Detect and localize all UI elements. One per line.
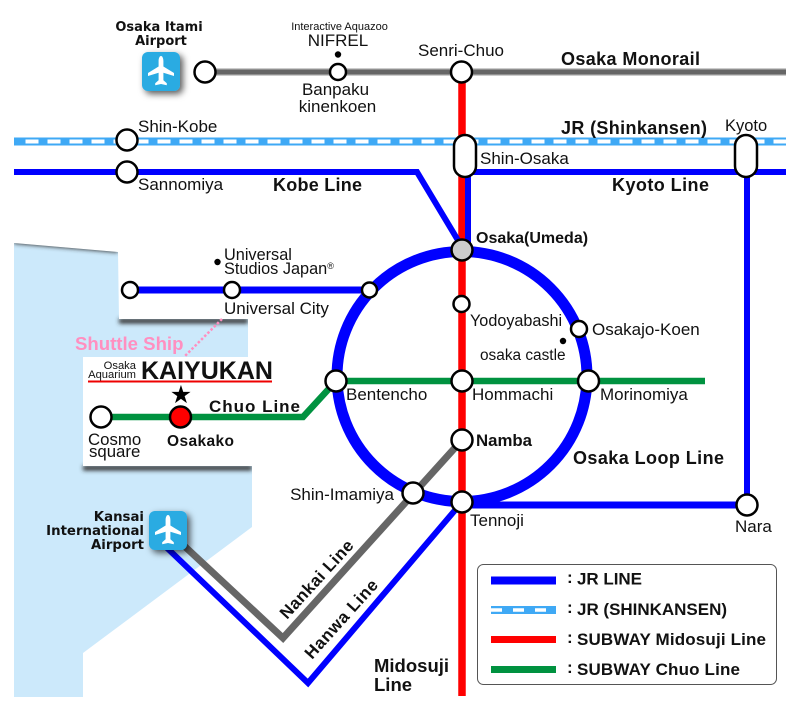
label: Universal Studios Japan: Universal <box>224 246 292 264</box>
label: Osaka Aquarium: Aquarium <box>88 369 136 381</box>
label: Universal Studios Japan: ® <box>327 261 334 271</box>
label: osaka castle: osaka castle <box>480 347 566 364</box>
line: Kyoto Line <box>468 172 786 505</box>
legend: Subway Chuo: : <box>567 658 573 677</box>
line: Osaka Loop Line <box>337 252 587 502</box>
label: Universal Studios Japan: Studios Japan <box>224 260 327 278</box>
label: Namba: Namba <box>476 431 533 450</box>
KAIYUKAN underline <box>88 380 272 382</box>
label: Osaka Loop Line: Osaka Loop Line <box>573 448 724 468</box>
label: Banpaku kinenkoen: Banpaku <box>302 80 369 99</box>
legend: JR Line <box>491 568 642 588</box>
label: osaka castle <box>480 338 566 364</box>
label: Yodoyabashi: Yodoyabashi <box>470 312 562 330</box>
label: Shuttle Ship: Shuttle Ship <box>75 333 183 354</box>
legend: Subway Midosuji: : <box>567 628 573 647</box>
label: Midosuji Line: Midosuji <box>374 655 449 676</box>
line: Tennoji to Nara <box>462 502 747 508</box>
legend: Subway Chuo <box>491 658 740 679</box>
label: Osaka Itami Airport: Osaka Itami <box>115 20 203 35</box>
label: Osaka Itami Airport: Airport <box>135 34 187 49</box>
label: Bentencho: Bentencho <box>346 385 427 404</box>
label: Morinomiya: Morinomiya <box>600 385 688 404</box>
legend: Subway Midosuji: SUBWAY Midosuji Line <box>577 630 766 649</box>
label: KAIYUKAN: KAIYUKAN <box>141 357 273 385</box>
label: Banpaku kinenkoen: kinenkoen <box>299 97 376 116</box>
line: Chuo subway <box>101 381 705 417</box>
label: Kansai International Airport: Kansai <box>94 510 144 525</box>
legend: Subway Midosuji <box>491 628 766 649</box>
line: Osaka Monorail <box>205 68 786 76</box>
line: Hanwa Line <box>165 502 462 683</box>
label: Kansai International Airport: Airport <box>91 538 145 553</box>
label: Kansai International Airport: International <box>46 524 144 539</box>
legend: JR Shinkansen: JR (SHINKANSEN) <box>577 600 727 619</box>
label: Kobe Line: Kobe Line <box>273 175 362 195</box>
line: JR Shinkansen <box>14 138 786 146</box>
label: Cosmo square: square <box>89 442 140 461</box>
label: Osaka Monorail: Osaka Monorail <box>561 49 700 69</box>
label: Hommachi: Hommachi <box>472 385 553 404</box>
label: Chuo Line: Chuo Line <box>209 397 300 416</box>
line: Universal City branch <box>130 286 369 294</box>
label: Cosmo square: Cosmo <box>88 430 141 449</box>
label: Sannomiya: Sannomiya <box>138 175 224 194</box>
line: Kobe Line <box>14 172 462 247</box>
legend: JR Shinkansen: : <box>567 598 573 617</box>
legend <box>478 564 776 684</box>
sea background <box>14 241 252 697</box>
label: Kyoto Line: Kyoto Line <box>612 175 709 195</box>
icon: Kansai airport <box>149 511 187 550</box>
label: Shin-Kobe: Shin-Kobe <box>138 117 217 136</box>
label: Osakajo-Koen: Osakajo-Koen <box>592 320 700 339</box>
label: Universal Studios Japan <box>214 246 334 278</box>
label: Osaka Aquarium: Osaka <box>104 360 137 372</box>
label: Nankai Line: Nankai Line <box>276 536 358 623</box>
shuttle ship route <box>184 319 222 357</box>
label: Midosuji Line: Line <box>374 674 412 695</box>
label: Hanwa Line: Hanwa Line <box>301 576 382 663</box>
label: Kyoto station: Kyoto <box>725 117 767 135</box>
label: NIFREL: NIFREL <box>308 31 368 50</box>
label: Universal City: Universal City <box>224 299 329 318</box>
legend: Subway Chuo: SUBWAY Chuo Line <box>577 660 740 679</box>
legend: JR Shinkansen <box>491 598 727 619</box>
legend: JR Line: : <box>567 568 573 587</box>
label: NIFREL <box>291 21 388 58</box>
icon: Itami airport <box>142 52 180 91</box>
label: Nara: Nara <box>735 517 772 536</box>
label: NIFREL: Interactive Aquazoo <box>291 21 388 33</box>
label: Osaka (Umeda): Osaka(Umeda) <box>476 230 588 247</box>
stations <box>90 62 758 516</box>
line: Nankai Line <box>165 440 462 638</box>
line: Midosuji subway <box>458 72 466 696</box>
label: Shin-Imamiya: Shin-Imamiya <box>290 485 395 504</box>
legend: JR Line: JR LINE <box>577 570 642 588</box>
icon: star: ★ <box>170 380 192 409</box>
label: JR (Shinkansen): JR (Shinkansen) <box>561 118 707 138</box>
label: Osakako: Osakako <box>167 433 234 450</box>
label: Tennoji: Tennoji <box>470 511 524 530</box>
label: Shin-Osaka: Shin-Osaka <box>480 149 569 168</box>
label: Senri-Chuo: Senri-Chuo <box>418 41 504 60</box>
